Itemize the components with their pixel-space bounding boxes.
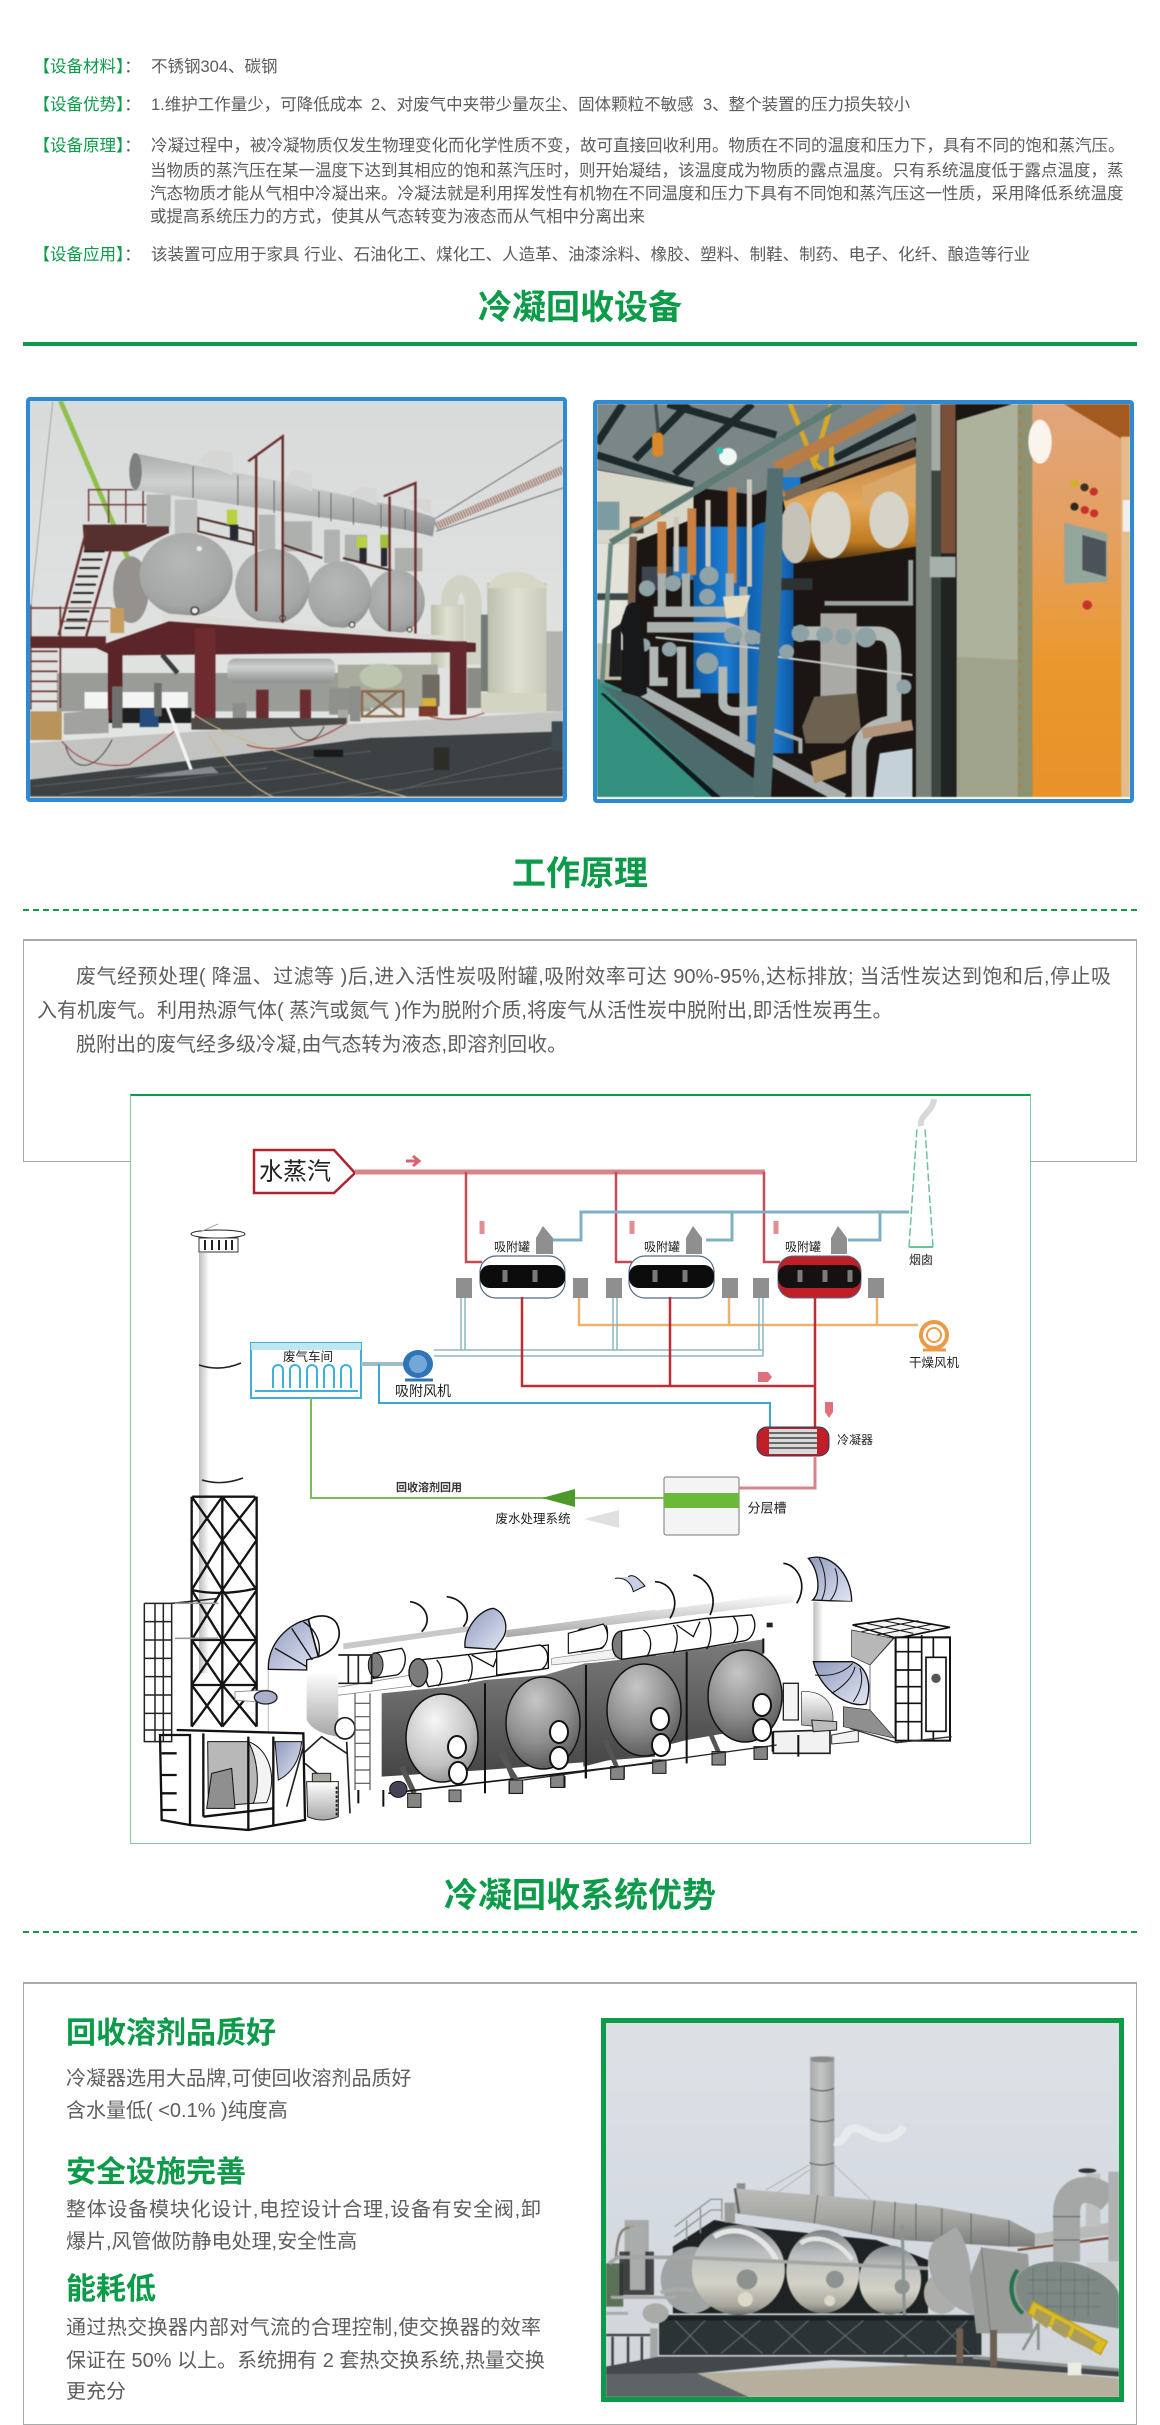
spec: advantages — [34, 96, 910, 114]
spec list — [34, 58, 1124, 264]
adsorption tanks — [480, 1256, 861, 1298]
right elbow — [808, 1557, 852, 1602]
upper duct shadow — [343, 1626, 468, 1649]
valves — [637, 567, 911, 694]
workshop — [251, 1343, 361, 1398]
casing right — [583, 1639, 763, 1767]
valves — [456, 1226, 884, 1298]
photo: indoor condensation unit — [593, 400, 1134, 803]
body text: 更充分 — [66, 2381, 126, 2403]
stairs and railings — [83, 525, 169, 551]
body text: 爆片,风管做防静电处理,安全性高 — [66, 2231, 357, 2253]
spec: principle: 汽态物质才能从气相中冷凝出来。冷凝法就是利用挥发性有机物在不同温度和压力下具有不同饱和蒸汽压这一性质，采用降低系统温度 — [150, 185, 1124, 203]
body text: 保证在 50% 以上。系统拥有 2 套热交换系统,热量交换 — [66, 2350, 545, 2372]
door pillar — [916, 404, 932, 799]
knockout vessel — [307, 1782, 338, 1820]
blue vessels — [694, 527, 747, 693]
frame — [776, 404, 902, 468]
legs — [500, 1725, 718, 1780]
body text: 含水量低( <0.1% )纯度高 — [66, 2100, 288, 2122]
spec: principle — [34, 136, 1124, 226]
tank labels — [494, 1240, 821, 1254]
heading: system advantages: 冷凝回收系统优势 — [444, 1877, 716, 1915]
right vertical ducts — [1067, 2190, 1110, 2262]
workers — [227, 510, 237, 525]
wastewater arrow — [495, 1510, 619, 1528]
collector duct — [133, 453, 436, 536]
spec: advantages: 2、对废气中夹带少量灰尘、固体颗粒不敏感 — [371, 96, 694, 114]
elbow — [268, 1619, 318, 1670]
flange — [254, 1691, 277, 1704]
body text: 冷凝器选用大品牌,可使回收溶剂品质好 — [66, 2068, 412, 2090]
down elbow — [928, 2227, 974, 2315]
lattice tower — [192, 1497, 257, 1727]
upper main duct shade right — [497, 1557, 952, 1793]
vessel legs — [402, 1753, 517, 1793]
insulated header — [783, 457, 916, 563]
vertical pipes — [662, 487, 732, 583]
back wall — [57, 673, 371, 711]
heading: 回收溶剂品质好 — [66, 2017, 276, 2050]
desorption pipes — [522, 1297, 815, 1427]
spec: advantages: 3、整个装置的压力损失较小 — [703, 96, 910, 114]
base rail — [600, 685, 754, 799]
transition box — [969, 2247, 1033, 2333]
lower deck clutter — [338, 665, 438, 708]
cooling return pipe — [379, 1364, 770, 1427]
drying air pipes — [579, 1298, 918, 1325]
spec: principle: 冷凝过程中，被冷凝物质仅发生物理变化而化学性质不变，故可直接回收利用。物质在不同的温度和压力下，具有不同的饱和蒸汽压。 — [151, 137, 1124, 155]
lower duct fittings — [418, 1645, 548, 1687]
spec: principle: 当物质的蒸汽压在某一温度下达到其相应的饱和蒸汽压时，则开始凝结，该温度成为物质的露点温度。只有系统温度低于露点温度，蒸 — [150, 162, 1124, 180]
heading: working principle: 工作原理 — [512, 855, 648, 893]
wall and window — [597, 470, 694, 543]
cross pipe and pole — [609, 2257, 928, 2268]
spec: application: 【设备应用】： — [34, 246, 141, 264]
lower tank — [228, 659, 335, 683]
ground — [606, 2363, 1119, 2397]
second elbow — [465, 1608, 506, 1649]
advantage: energy — [66, 2273, 545, 2403]
lower duct — [235, 1675, 412, 1703]
spec: material: 不锈钢304、碳钢 — [151, 58, 278, 76]
adsorption fan: 吸附风机 — [395, 1383, 451, 1399]
spec: material — [34, 58, 278, 76]
spec: material: 【设备材料】： — [34, 58, 141, 76]
body text: 通过热交换器内部对气流的合理控制,使交换器的效率 — [66, 2317, 541, 2339]
panel: advantages — [23, 1982, 1137, 2425]
adsorption fan — [361, 1350, 451, 1399]
photo: rooftop condensation plant — [26, 397, 567, 802]
stack — [810, 2057, 834, 2197]
heading: condensation recovery equipment: 冷凝回收设备 — [478, 289, 682, 327]
principle paragraph: 脱附出的废气经多级冷凝,由气态转为液态,即溶剂回收。 — [76, 1034, 567, 1056]
heading: 安全设施完善 — [66, 2156, 246, 2189]
fan skid — [208, 1742, 271, 1807]
panel: working principle text — [23, 939, 1137, 1162]
tank labels: 吸附罐 — [644, 1240, 680, 1254]
body text — [66, 2198, 541, 2253]
stack and label: 烟囱 — [909, 1253, 933, 1267]
process air pipes — [434, 1298, 763, 1356]
steam input tag: 水蒸汽 — [259, 1158, 331, 1186]
parapet and roof — [30, 711, 563, 780]
tank labels: 吸附罐 — [494, 1240, 530, 1254]
advantage: safety — [66, 2156, 541, 2253]
crane — [60, 401, 129, 561]
front frame column — [753, 468, 783, 797]
condenser — [757, 1427, 873, 1456]
left half of model — [144, 1497, 655, 1830]
clutter — [30, 711, 62, 740]
machinery void — [631, 437, 918, 799]
3D equipment model — [144, 1224, 952, 1830]
body text: 整体设备模块化设计,电控设计合理,设备有安全阀,卸 — [66, 2199, 541, 2221]
spec: principle: 【设备原理】： — [34, 137, 141, 155]
access cage — [144, 1598, 218, 1742]
drying fan — [909, 1322, 959, 1370]
condenser: 冷凝器 — [837, 1432, 873, 1447]
solvent return line: 回收溶剂回用 — [396, 1480, 462, 1494]
vessels — [406, 1650, 782, 1784]
spec: principle: 或提高系统压力的方式，使其从气态转变为液态而从气相中分离出来 — [150, 208, 645, 226]
stack and label — [909, 1099, 934, 1267]
flow schematic — [251, 1099, 959, 1535]
separator — [664, 1477, 787, 1535]
insulated tanks — [924, 2273, 960, 2314]
advantage: solvent quality — [66, 2016, 412, 2122]
spec: advantages: 【设备优势】： — [34, 96, 141, 114]
exhaust stack — [191, 1224, 245, 1673]
process pipes — [647, 612, 761, 639]
downcomer — [813, 1602, 852, 1662]
vertical riser — [268, 1670, 307, 1733]
tanks — [368, 570, 425, 633]
upper equipment — [147, 495, 171, 526]
dark background and handrail — [673, 2220, 928, 2313]
steam input tag — [254, 1150, 355, 1193]
control cabinet — [957, 404, 1019, 799]
floor — [597, 678, 721, 799]
back right pipes — [1035, 2227, 1119, 2240]
scrubbers — [431, 605, 464, 668]
dashed rule — [23, 1931, 1137, 1933]
principle paragraph: 入有机废气。利用热源气体( 蒸汽或氮气 )作为脱附介质,将废气从活性炭中脱附出,即活性炭再生。 — [37, 1000, 893, 1022]
drying fan: 干燥风机 — [909, 1356, 959, 1370]
spec: application: 该装置可应用于家具 行业、石油化工、煤化工、人造革、油漆涂料、橡胶、塑料、制鞋、制药、电子、化纤、酿造等行业 — [151, 246, 1030, 264]
heading rule — [23, 342, 1137, 346]
principle paragraph: 废气经预处理( 降温、过滤等 )后,进入活性炭吸附罐,吸附效率可达 90%-95%,达标排放; 当活性炭达到饱和后,停止吸 — [76, 966, 1111, 988]
filter box — [852, 1630, 893, 1665]
derricks — [248, 436, 415, 636]
separator: 分层槽 — [747, 1500, 787, 1516]
workers — [619, 602, 647, 702]
principle paragraph — [37, 966, 1111, 1056]
exhaust pipes — [551, 1212, 909, 1240]
dashed rule — [23, 909, 1137, 911]
upper duct — [507, 1593, 793, 1637]
ladder — [355, 1693, 370, 1790]
photo: installed recovery system — [601, 2018, 1124, 2402]
ceiling — [597, 404, 918, 498]
body text — [66, 2068, 412, 2122]
lower duct fittings — [497, 1645, 548, 1675]
steam pipes — [355, 1156, 780, 1262]
wastewater arrow: 废水处理系统 — [495, 1511, 571, 1526]
casing — [382, 1658, 655, 1777]
heading: 能耗低 — [66, 2273, 156, 2306]
main duct — [735, 2188, 1035, 2247]
solvent return line — [311, 1398, 664, 1507]
workshop: 废气车间 — [283, 1349, 333, 1364]
steel platform — [162, 613, 450, 640]
pump — [783, 1683, 798, 1720]
left vessel — [625, 2220, 649, 2290]
fan — [1087, 2263, 1119, 2286]
tank labels: 吸附罐 — [785, 1240, 821, 1254]
panel: process diagram — [130, 1094, 1031, 1844]
spec: advantages: 1.维护工作量少，可降低成本 — [151, 96, 363, 114]
steel frame — [659, 2315, 981, 2355]
body text — [66, 2316, 545, 2403]
